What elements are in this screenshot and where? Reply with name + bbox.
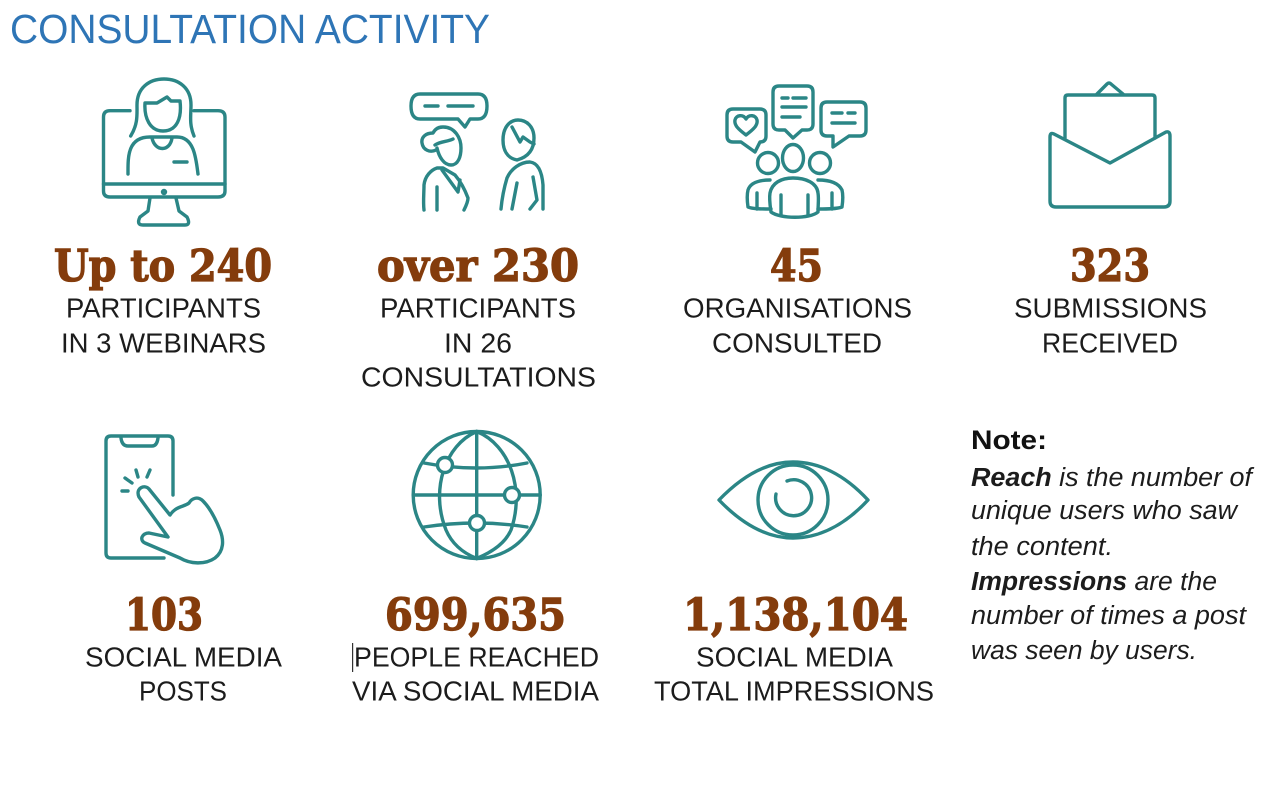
icon: eye [719,462,868,538]
icon: globe with nodes [413,432,540,558]
label: participants in 26 consultations [361,292,596,392]
title: CONSULTATION ACTIVITY [10,6,490,52]
value: 1,138,104: 1,138,104 [683,590,908,641]
value: 699,635: 699,635 [385,590,566,641]
panel: organisations [683,86,912,358]
label: people reached via social media [352,642,599,706]
icon: hand tapping phone [106,436,223,563]
panel: people reached [352,432,599,706]
text block: note: the content. [971,533,1113,561]
label: people reached via social media: PEOPLE REACHED [354,642,599,672]
text block: note: Reach is the number of [971,464,1255,492]
label: organisations consulted: ORGANISATIONS [683,292,912,324]
value: up to 240: Up to 240 [54,241,272,292]
label: participants in 3 webinars [61,292,266,358]
panel: webinars [54,79,272,358]
value: over 230: over 230 [377,241,579,292]
icon: two people talking [411,94,543,210]
label: submissions received [1014,292,1207,358]
label: participants in 3 webinars: PARTICIPANTS [66,292,261,324]
text block: note: number of times a post [971,602,1247,630]
text block: note: Impressions are the [971,568,1217,596]
value: 323: 323 [1070,241,1150,292]
label: people reached via social media: VIA SOCIAL MEDIA [352,676,599,706]
label: organisations consulted [683,292,912,358]
icon: group with speech bubbles [727,86,866,217]
label: social media posts: POSTS [139,676,227,706]
label: submissions received: SUBMISSIONS [1014,292,1207,324]
label: social media total impressions [654,642,934,706]
label: social media posts: SOCIAL MEDIA [85,642,282,672]
text block: note: was seen by users. [971,637,1197,665]
label: social media total impressions: TOTAL IMPRESSIONS [654,676,934,706]
label: participants in 26 consultations: PARTICIPANTS [380,292,576,324]
label: participants in 3 webinars: IN 3 WEBINARS [61,328,266,358]
panel: total impressions [654,462,934,706]
label: submissions received: RECEIVED [1042,328,1178,358]
label: social media total impressions: SOCIAL MEDIA [696,642,893,672]
value: 45: 45 [770,241,823,292]
icon: person on monitor [104,79,225,225]
label: participants in 26 consultations: CONSULTATIONS [361,362,596,392]
label: participants in 26 consultations: IN 26 [444,328,512,358]
text block: note: Note: [971,425,1047,455]
label: organisations consulted: CONSULTED [712,328,882,358]
icon: open envelope [1050,83,1170,207]
panel: consultations [361,94,596,392]
text block: note [971,425,1255,665]
panel: social media posts [85,436,282,706]
value: 103: 103 [125,590,203,641]
text block: note: unique users who saw [971,497,1239,525]
panel: submissions [1014,83,1207,358]
label: social media posts [85,642,282,706]
